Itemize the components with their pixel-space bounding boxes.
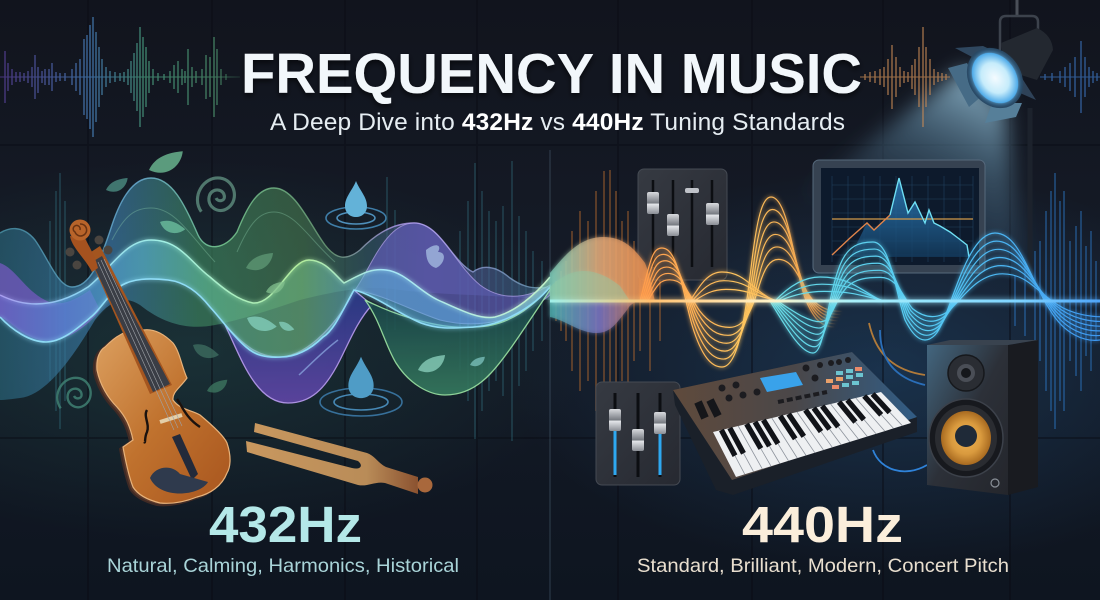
- blue line wave bundle: [770, 233, 1100, 353]
- background spectrum bars middle: [50, 161, 1096, 441]
- swirl lower left: [57, 378, 91, 408]
- orange line wave bundle: [640, 197, 842, 367]
- calm wave ribbons 432Hz: [0, 178, 550, 403]
- subtitle: A Deep Dive into 432Hz vs 440Hz Tuning Standards: [270, 109, 845, 136]
- violin: [66, 220, 230, 505]
- caption: 432Hz qualities: Natural, Calming, Harmonics, Historical: [107, 555, 459, 577]
- transition ribbon to 440Hz: [550, 237, 655, 333]
- caption: 440Hz qualities: Standard, Brilliant, Modern, Concert Pitch: [637, 555, 1009, 577]
- decorative waveform top left: [0, 17, 240, 137]
- water drop lower: [320, 357, 402, 416]
- heading: 440Hz: 440Hz: [742, 496, 903, 553]
- glowing center line: [550, 300, 1100, 302]
- title: FREQUENCY IN MUSIC: [241, 43, 862, 106]
- decorative waveform top right orange: [860, 27, 950, 127]
- MIDI keyboard: [673, 352, 917, 495]
- leaves floating on the wave: [106, 151, 485, 393]
- stage light pole: [1028, 108, 1032, 292]
- decorative waveform top right blue: [1040, 41, 1100, 113]
- spectrum monitor: [813, 160, 985, 273]
- tuning fork: [246, 423, 432, 494]
- water drop upper: [326, 181, 386, 229]
- mixer panel bottom: [596, 382, 680, 485]
- mixer panel top: [638, 169, 727, 280]
- studio speaker: [927, 340, 1038, 495]
- heading: 432Hz: 432Hz: [209, 496, 362, 553]
- audio cables: [869, 323, 927, 471]
- swirl upper: [197, 178, 234, 212]
- spotlight beam: [800, 68, 1022, 265]
- stage spotlight: [948, 0, 1053, 123]
